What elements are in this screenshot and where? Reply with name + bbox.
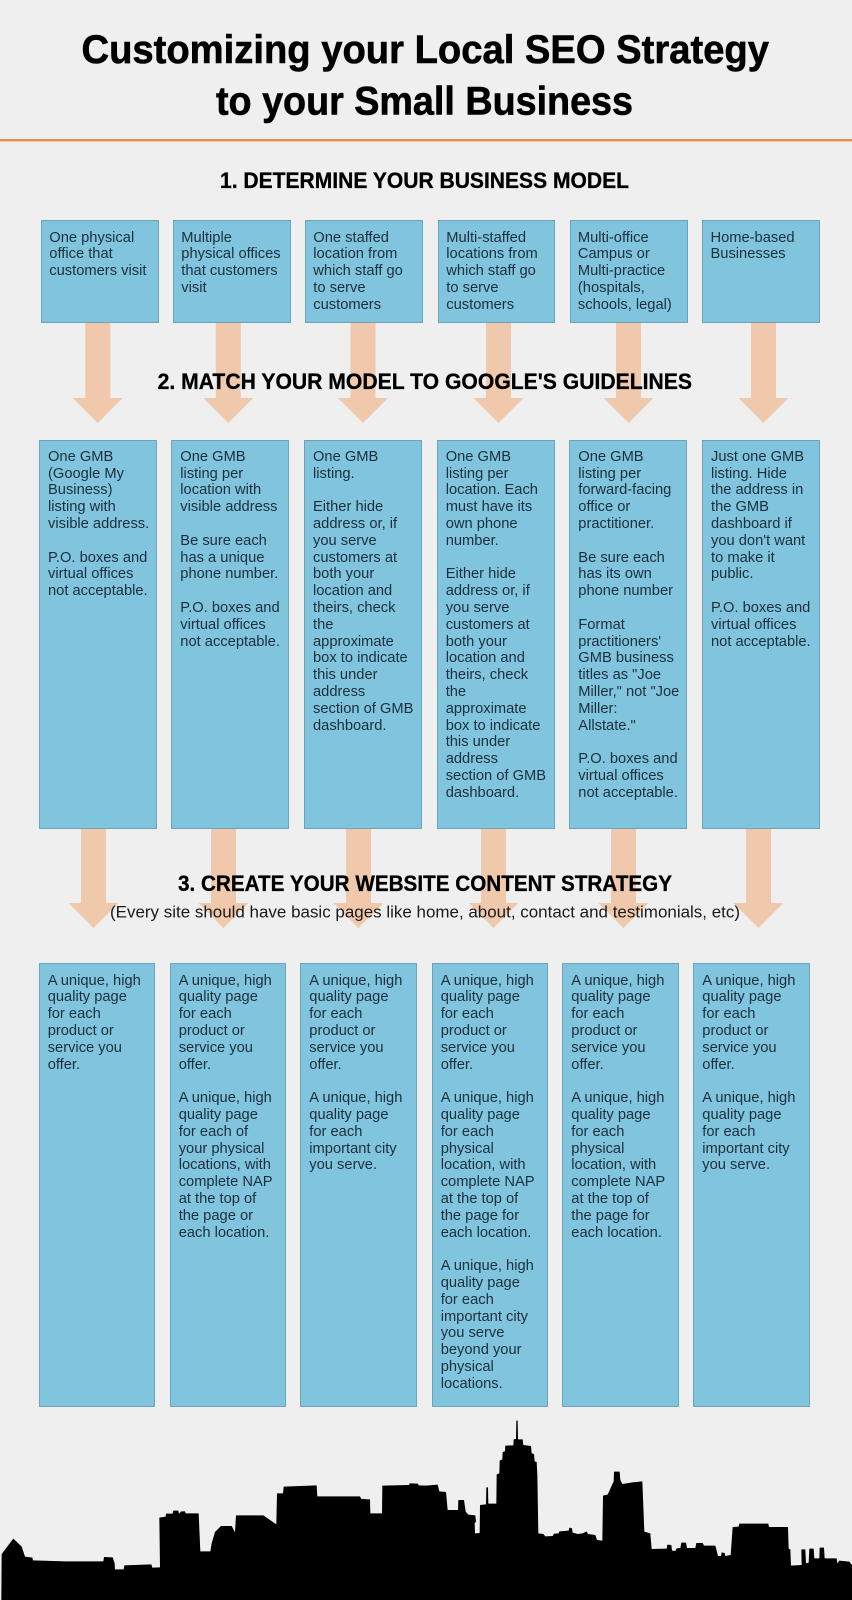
panel: guideline 6: virtual offices	[711, 617, 796, 633]
panel: guideline 3: address	[313, 684, 365, 700]
panel: content strategy 3: for each	[309, 1124, 362, 1140]
panel: content strategy 1: product or	[48, 1023, 114, 1039]
heading: step 3: 3. CREATE YOUR WEBSITE CONTENT STRATEGY	[178, 871, 672, 896]
panel: content strategy 3: quality page	[309, 989, 389, 1005]
panel: guideline 5: not acceptable.	[578, 785, 678, 801]
panel: business model 3	[305, 220, 423, 323]
panel: guideline 4: box to indicate	[446, 718, 540, 734]
panel: content strategy 4: for each	[441, 1124, 494, 1140]
panel: guideline 3: the	[313, 617, 333, 633]
panel: guideline 5: has its own	[578, 566, 652, 582]
panel: business model 5: Campus or	[578, 246, 650, 262]
panel: content strategy 1: quality page	[48, 989, 127, 1005]
panel: guideline 5: P.O. boxes and	[578, 751, 678, 767]
panel: guideline 5: office or	[578, 499, 630, 515]
panel: guideline 3: this under	[313, 667, 378, 683]
panel: content strategy 2	[170, 963, 286, 1407]
panel: guideline 4: number.	[446, 533, 499, 549]
panel: content strategy 6: quality page	[702, 1107, 782, 1123]
panel: guideline 3: location and	[313, 583, 392, 599]
panel: content strategy 4: quality page	[441, 1275, 520, 1291]
panel: content strategy 2: quality page	[179, 1107, 258, 1123]
heading: step 1: 1. DETERMINE YOUR BUSINESS MODEL	[220, 168, 629, 193]
panel: guideline 4: location and	[446, 650, 525, 666]
panel: guideline 5: Miller," not "Joe	[578, 684, 679, 700]
panel: content strategy 3	[300, 963, 417, 1407]
panel: guideline 6: you don't want	[711, 533, 805, 549]
panel: business model 4: customers	[446, 297, 514, 313]
panel: content strategy 2: complete NAP	[179, 1174, 273, 1190]
panel: business model 4: to serve	[446, 280, 499, 296]
panel: guideline 3: address or, if	[313, 516, 397, 532]
panel: guideline 2: Be sure each	[180, 533, 267, 549]
panel: content strategy 4: A unique, high	[441, 1090, 534, 1106]
panel: content strategy 5: for each	[571, 1124, 624, 1140]
panel: business model 4: Multi-staffed	[446, 230, 526, 246]
panel: guideline 5: Be sure each	[578, 550, 665, 566]
panel: content strategy 6: for each	[702, 1124, 755, 1140]
panel: content strategy 6: A unique, high	[702, 973, 795, 989]
panel: content strategy 4: A unique, high	[441, 973, 534, 989]
panel: content strategy 2: A unique, high	[179, 1090, 272, 1106]
panel: guideline 4: listing per	[446, 466, 509, 482]
panel: guideline 4: section of GMB	[446, 768, 546, 784]
heading: step 2: 2. MATCH YOUR MODEL TO GOOGLE'S GUIDELINES	[158, 369, 692, 394]
panel: business model 5	[570, 220, 688, 323]
panel: guideline 2: virtual offices	[180, 617, 266, 633]
panel: content strategy 4: each location.	[441, 1225, 531, 1241]
panel: guideline 4: this under	[446, 734, 510, 750]
panel: content strategy 2: product or	[179, 1023, 245, 1039]
panel: guideline 6: dashboard if	[711, 516, 792, 532]
panel: guideline 6	[702, 440, 820, 829]
panel: content strategy 1: A unique, high	[48, 973, 141, 989]
panel: guideline 1: not acceptable.	[48, 583, 148, 599]
panel: content strategy 5: each location.	[571, 1225, 662, 1241]
panel: content strategy 5: service you	[571, 1040, 646, 1056]
panel: guideline 4: own phone	[446, 516, 518, 532]
title: to your Small Business	[216, 79, 633, 123]
panel: guideline 1: visible address.	[48, 516, 149, 532]
panel: business model 3: customers	[313, 297, 381, 313]
panel: business model 4: locations from	[446, 246, 538, 262]
panel: content strategy 3: offer.	[309, 1057, 342, 1073]
panel: guideline 5: Allstate."	[578, 718, 636, 734]
panel: guideline 5: titles as "Joe	[578, 667, 661, 683]
panel: business model 5: schools, legal)	[578, 297, 672, 313]
panel: content strategy 2: A unique, high	[179, 973, 272, 989]
panel: guideline 1	[39, 440, 157, 829]
panel: business model 3: to serve	[313, 280, 366, 296]
panel: guideline 5: GMB business	[578, 650, 674, 666]
panel: content strategy 3: quality page	[309, 1107, 389, 1123]
panel: guideline 4: the	[446, 684, 466, 700]
title: Customizing your Local SEO Strategy	[82, 28, 770, 72]
panel: guideline 3: One GMB	[313, 449, 378, 465]
panel: content strategy 3: for each	[309, 1006, 362, 1022]
orange divider	[0, 139, 852, 141]
panel: guideline 4: One GMB	[446, 449, 511, 465]
panel: business model 4	[438, 220, 555, 323]
panel: content strategy 5: product or	[571, 1023, 637, 1039]
panel: guideline 5	[569, 440, 687, 829]
panel: guideline 1: P.O. boxes and	[48, 550, 147, 566]
panel: content strategy 1: offer.	[48, 1057, 80, 1073]
panel: guideline 1: listing with	[48, 499, 116, 515]
panel: content strategy 6: product or	[702, 1023, 768, 1039]
skyline silhouette	[1, 1421, 852, 1600]
panel: business model 1	[41, 220, 159, 323]
panel: business model 4: which staff go	[446, 263, 536, 279]
panel: business model 3: location from	[313, 246, 397, 262]
panel: content strategy 1	[39, 963, 155, 1407]
panel: content strategy 4: for each	[441, 1006, 494, 1022]
panel: guideline 6: to make it	[711, 550, 775, 566]
panel: content strategy 2: for each of	[179, 1124, 248, 1140]
panel: guideline 6: listing. Hide	[711, 466, 787, 482]
panel: guideline 6: Just one GMB	[711, 449, 804, 465]
panel: content strategy 5: offer.	[571, 1057, 604, 1073]
panel: guideline 6: the GMB	[711, 499, 769, 515]
panel: guideline 5: virtual offices	[578, 768, 664, 784]
panel: guideline 4: Either hide	[446, 566, 516, 582]
panel: business model 2	[173, 220, 290, 323]
panel: content strategy 5: location, with	[571, 1157, 656, 1173]
panel: guideline 1: One GMB	[48, 449, 113, 465]
panel: guideline 6: P.O. boxes and	[711, 600, 810, 616]
panel: content strategy 4: at the top of	[441, 1191, 518, 1207]
panel: content strategy 6	[693, 963, 810, 1407]
panel: content strategy 6: A unique, high	[702, 1090, 795, 1106]
panel: guideline 4: approximate	[446, 701, 527, 717]
panel: business model 3: One staffed	[313, 230, 389, 246]
panel: guideline 1: (Google My	[48, 466, 124, 482]
panel: content strategy 5: physical	[571, 1141, 624, 1157]
panel: guideline 5: practitioners'	[578, 634, 661, 650]
panel: content strategy 4: service you	[441, 1040, 515, 1056]
panel: guideline 4: must have its	[446, 499, 532, 515]
panel: guideline 3: dashboard.	[313, 718, 386, 734]
arrow row 2	[68, 829, 784, 928]
panel: guideline 5: practitioner.	[578, 516, 654, 532]
panel: business model 5: Multi-practice	[578, 263, 665, 279]
panel: guideline 4: location. Each	[446, 482, 538, 498]
panel: guideline 5: listing per	[578, 466, 641, 482]
panel: business model 1: office that	[49, 246, 113, 262]
panel: content strategy 3: A unique, high	[309, 973, 402, 989]
panel: guideline 3: customers at	[313, 550, 397, 566]
panel: content strategy 3: A unique, high	[309, 1090, 402, 1106]
panel: guideline 4: you serve	[446, 600, 509, 616]
panel: content strategy 5: complete NAP	[571, 1174, 665, 1190]
panel: content strategy 4: offer.	[441, 1057, 473, 1073]
panel: guideline 3: listing.	[313, 466, 355, 482]
panel: guideline 4: dashboard.	[446, 785, 519, 801]
panel: content strategy 5: at the top of	[571, 1191, 649, 1207]
panel: content strategy 4: physical	[441, 1141, 494, 1157]
panel: guideline 2: listing per	[180, 466, 243, 482]
panel: guideline 5: Format	[578, 617, 625, 633]
panel: content strategy 2: each location.	[179, 1225, 269, 1241]
panel: guideline 5: Miller:	[578, 701, 617, 717]
panel: content strategy 2: your physical	[179, 1141, 264, 1157]
panel: content strategy 6: important city	[702, 1141, 790, 1157]
panel: business model 1: customers visit	[49, 263, 146, 279]
panel: business model 2: that customers	[181, 263, 278, 279]
panel: content strategy 2: quality page	[179, 989, 258, 1005]
panel: guideline 3: Either hide	[313, 499, 383, 515]
panel: content strategy 1: for each	[48, 1006, 101, 1022]
panel: business model 1: One physical	[49, 230, 134, 246]
panel: content strategy 5: for each	[571, 1006, 624, 1022]
panel: content strategy 6: service you	[702, 1040, 777, 1056]
panel: guideline 4: customers at	[446, 617, 530, 633]
panel: business model 6	[702, 220, 820, 323]
panel: business model 6: Home-based	[710, 230, 795, 246]
panel: guideline 3: you serve	[313, 533, 377, 549]
panel: guideline 2: has a unique	[180, 550, 264, 566]
panel: guideline 5: forward-facing	[578, 482, 671, 498]
panel: content strategy 4: A unique, high	[441, 1258, 534, 1274]
panel: guideline 4	[437, 440, 555, 829]
panel: content strategy 4: for each	[441, 1292, 494, 1308]
panel: content strategy 6: offer.	[702, 1057, 735, 1073]
panel: guideline 2: not acceptable.	[180, 634, 280, 650]
panel: content strategy 4: you serve	[441, 1325, 504, 1341]
panel: content strategy 5: A unique, high	[571, 1090, 664, 1106]
panel: content strategy 5: quality page	[571, 1107, 651, 1123]
panel: content strategy 4: the page for	[441, 1208, 519, 1224]
panel: guideline 3: box to indicate	[313, 650, 408, 666]
panel: content strategy 4: complete NAP	[441, 1174, 535, 1190]
panel: content strategy 3: service you	[309, 1040, 384, 1056]
panel: content strategy 4: quality page	[441, 989, 520, 1005]
panel: content strategy 3: you serve.	[309, 1157, 377, 1173]
title	[82, 28, 770, 123]
panel: guideline 4: both your	[446, 634, 507, 650]
panel: content strategy 2: at the top of	[179, 1191, 256, 1207]
panel: business model 5: Multi-office	[578, 230, 649, 246]
panel: guideline 6: public.	[711, 566, 753, 582]
panel: guideline 3	[304, 440, 422, 829]
panel: guideline 6: the address in	[711, 482, 803, 498]
panel: content strategy 5	[562, 963, 679, 1407]
panel: content strategy 4: location, with	[441, 1157, 526, 1173]
panel: content strategy 4: quality page	[441, 1107, 520, 1123]
panel: business model 5: (hospitals,	[578, 280, 645, 296]
arrow row 1	[73, 323, 789, 423]
panel: guideline 4: theirs, check	[446, 667, 528, 683]
panel: guideline 2: visible address	[180, 499, 277, 515]
panel: business model 2: physical offices	[181, 246, 281, 262]
panel: business model 2: visit	[181, 280, 207, 296]
panel: business model 3: which staff go	[313, 263, 403, 279]
panel: content strategy 4: physical	[441, 1359, 494, 1375]
panel: content strategy 6: you serve.	[702, 1157, 770, 1173]
panel: guideline 2: P.O. boxes and	[180, 600, 280, 616]
panel: content strategy 5: the page for	[571, 1208, 650, 1224]
panel: content strategy 3: important city	[309, 1141, 397, 1157]
panel: business model 2: Multiple	[181, 230, 232, 246]
panel: content strategy 2: the page or	[179, 1208, 253, 1224]
panel: guideline 2: One GMB	[180, 449, 246, 465]
panel: content strategy 6: quality page	[702, 989, 782, 1005]
panel: content strategy 1: service you	[48, 1040, 122, 1056]
panel: content strategy 4: locations.	[441, 1376, 503, 1392]
panel: content strategy 2: for each	[179, 1006, 232, 1022]
panel: guideline 2: location with	[180, 482, 261, 498]
panel: guideline 3: theirs, check	[313, 600, 395, 616]
panel: content strategy 2: service you	[179, 1040, 253, 1056]
panel: guideline 2	[171, 440, 289, 829]
panel: content strategy 4: beyond your	[441, 1342, 522, 1358]
panel: guideline 4: address or, if	[446, 583, 530, 599]
panel: guideline 3: both your	[313, 566, 374, 582]
panel: content strategy 4: product or	[441, 1023, 507, 1039]
panel: content strategy 5: quality page	[571, 989, 651, 1005]
panel: content strategy 4: important city	[441, 1309, 528, 1325]
panel: guideline 3: section of GMB	[313, 701, 413, 717]
panel: content strategy 2: locations, with	[179, 1157, 271, 1173]
panel: content strategy 4	[432, 963, 548, 1407]
panel: content strategy 3: product or	[309, 1023, 375, 1039]
panel: content strategy 5: A unique, high	[571, 973, 664, 989]
subheading: step 3 note: (Every site should have basic pages like home, about, contact and testimonials, etc)	[110, 904, 740, 922]
panel: guideline 2: phone number.	[180, 566, 278, 582]
panel: guideline 4: address	[446, 751, 498, 767]
panel: content strategy 6: for each	[702, 1006, 755, 1022]
panel: guideline 1: Business)	[48, 482, 112, 498]
panel: guideline 6: not acceptable.	[711, 634, 811, 650]
panel: guideline 1: virtual offices	[48, 566, 133, 582]
panel: guideline 3: approximate	[313, 634, 394, 650]
panel: business model 6: Businesses	[710, 246, 786, 262]
panel: guideline 5: One GMB	[578, 449, 644, 465]
panel: guideline 5: phone number	[578, 583, 673, 599]
panel: content strategy 2: offer.	[179, 1057, 211, 1073]
